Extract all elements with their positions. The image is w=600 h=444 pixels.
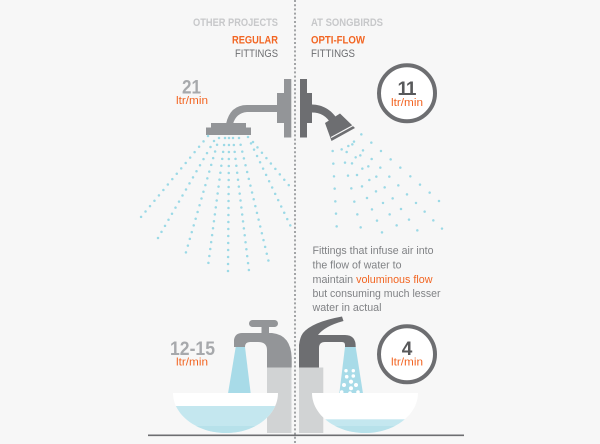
heading: at songbirds column: [311, 17, 383, 60]
value: regular tap 12-15 ltr/min: ltr/min: [176, 356, 208, 368]
label: opti-flow fittings: OPTI-FLOW: [311, 35, 366, 47]
value badge: opti-flow shower 11 ltr/min: ltr/min: [391, 97, 423, 109]
value badge: opti-flow tap 4 ltr/min: [379, 326, 435, 382]
water stream: opti-flow tap with air bubbles: [339, 347, 363, 395]
infographic: regular vs opti-flow water fittings: [140, 0, 464, 443]
label: regular fittings: FITTINGS: [235, 48, 278, 60]
value: regular shower 21 ltr/min: 21: [182, 78, 201, 98]
text block: opti-flow description: maintain voluminous flow: [312, 274, 433, 286]
text block: opti-flow description: water in actual: [312, 302, 382, 314]
text block: opti-flow description: Fittings that infuse air into: [312, 245, 434, 257]
label: opti-flow fittings: FITTINGS: [311, 48, 355, 60]
icon: opti-flow tap and counter column: [299, 316, 356, 433]
value badge: opti-flow shower 11 ltr/min: [379, 65, 435, 121]
label: regular fittings: REGULAR: [232, 35, 278, 47]
value: regular tap 12-15 ltr/min: 12-15: [170, 339, 215, 360]
value badge: opti-flow tap 4 ltr/min: ltr/min: [391, 356, 423, 368]
heading: at songbirds column: AT SONGBIRDS: [311, 17, 383, 29]
icon: regular shower head: [206, 79, 291, 138]
text block: opti-flow description: but consuming much lesser: [312, 288, 441, 300]
value: regular shower 21 ltr/min: ltr/min: [176, 95, 208, 107]
water spray: regular shower rays: [141, 136, 292, 271]
label: regular fittings: [232, 35, 278, 60]
water spray: opti-flow aerated drops: [333, 134, 442, 232]
value: regular shower 21 ltr/min: [176, 78, 208, 107]
text block: opti-flow description: [312, 245, 441, 314]
icon: regular tap and counter column: [234, 320, 292, 433]
icon: regular basin with water: [176, 393, 278, 433]
value badge: opti-flow tap 4 ltr/min: 4: [402, 339, 413, 360]
icon: opti-flow basin with water: [312, 393, 405, 433]
icon: opti-flow shower head: [300, 79, 355, 141]
heading: other projects column: [193, 17, 278, 60]
text block: opti-flow description: the flow of water to: [312, 260, 402, 272]
water stream: regular tap: [228, 347, 251, 394]
value badge: opti-flow shower 11 ltr/min: 11: [398, 79, 417, 100]
heading: other projects column: OTHER PROJECTS: [193, 17, 278, 29]
label: opti-flow fittings: [311, 35, 366, 60]
value: regular tap 12-15 ltr/min: [170, 339, 215, 368]
